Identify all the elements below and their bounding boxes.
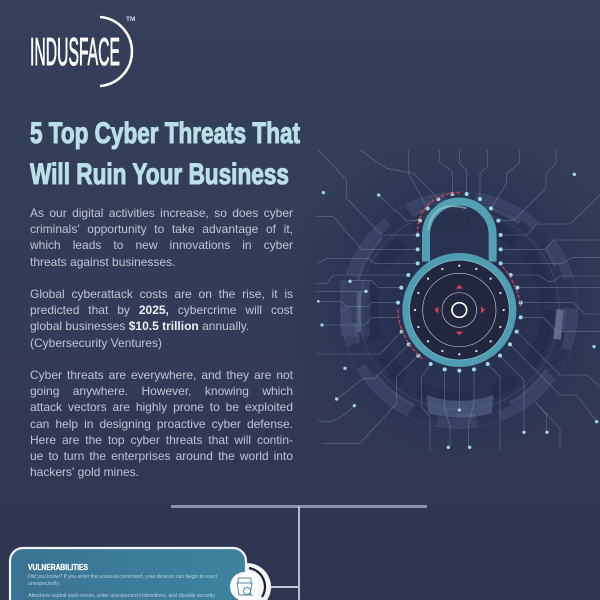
text block: threats paragraph: ue to turn the enterprises around the world into	[30, 449, 293, 463]
lock body	[406, 257, 513, 363]
icon: vulnerability badge	[230, 572, 259, 600]
text block: cost paragraph: (Cybersecurity Ventures)	[30, 336, 162, 350]
text block: cost paragraph	[30, 287, 293, 350]
text block: threats paragraph: Cyber threats are everywhere, and they are not	[30, 368, 293, 382]
text block: intro paragraph: criminals' opportunity to take advantage of it,	[30, 222, 293, 236]
card body text	[28, 574, 217, 599]
connector lines	[171, 505, 427, 600]
text block: threats paragraph: going anywhere. However, knowing which	[30, 384, 293, 398]
card body text: Attackers exploit such errors, enter unexpected instructions, and disable security	[28, 593, 215, 599]
text block: intro paragraph	[30, 206, 293, 269]
concentric tech rings	[340, 192, 578, 428]
logo: TM	[126, 16, 135, 23]
text block: threats paragraph	[30, 368, 293, 479]
text block: intro paragraph: As our digital activities increase, so does cyber	[30, 206, 293, 220]
text block: threats paragraph: can help in designing proactive cyber defense.	[30, 417, 293, 431]
icon backing: white outer disc	[223, 563, 271, 600]
title: Will Ruin Your Business	[30, 158, 289, 191]
shackle	[426, 202, 493, 262]
card: vulnerabilities	[10, 548, 246, 600]
text block: threats paragraph: hackers' gold mines.	[30, 465, 139, 479]
dark crescent around icon	[249, 568, 265, 597]
text block: cost paragraph: global businesses $10.5 trillion annually.	[30, 319, 249, 333]
dial	[423, 273, 496, 347]
title	[30, 117, 300, 191]
logo	[30, 16, 135, 86]
illustration: padlock with circuit lines	[317, 150, 600, 450]
card body text: unexpectedly.	[28, 581, 60, 587]
card body text: Did you know? If you enter the unusual command, your devices can begin to react	[28, 574, 217, 580]
text block: intro paragraph: threats against businesses.	[30, 255, 175, 269]
backdrop: dark glow behind lock	[279, 130, 600, 490]
title: 5 Top Cyber Threats That	[30, 117, 300, 150]
background and graphics layer: INDUSFACE	[30, 31, 120, 74]
red dashed arcs	[398, 193, 521, 359]
card heading: VULNERABILITIES	[28, 563, 89, 572]
text block: cost paragraph: predicted that by 2025, cybercrime will cost	[30, 303, 293, 317]
text block: threats paragraph: attack vectors are highly prone to be exploited	[30, 400, 293, 414]
text block: intro paragraph: which leads to new innovations in cyber	[30, 238, 293, 252]
text block: threats paragraph: Here are the top cyber threats that will contin-	[30, 433, 293, 447]
circuit traces	[317, 150, 600, 450]
dots	[317, 173, 598, 449]
text block: cost paragraph: Global cyberattack costs are on the rise, it is	[30, 287, 293, 301]
